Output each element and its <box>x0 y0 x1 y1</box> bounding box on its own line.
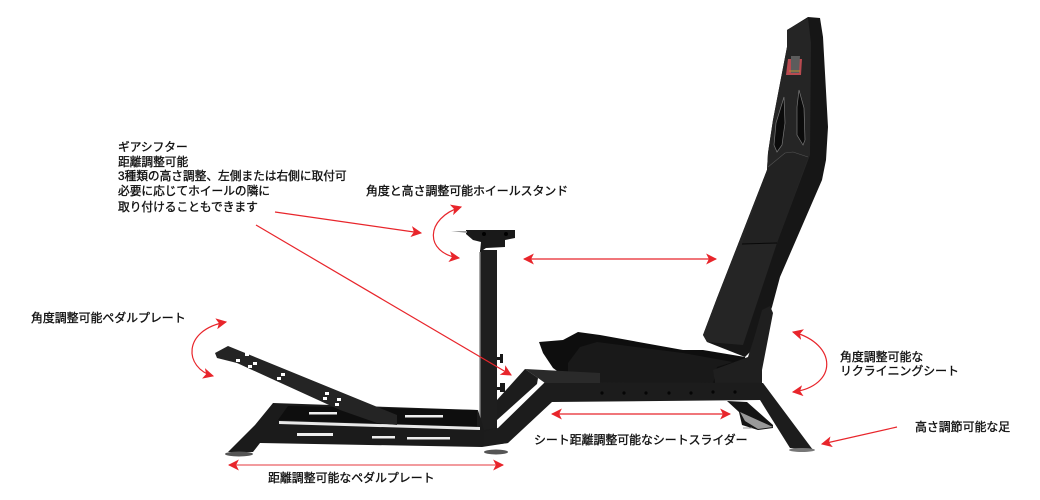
label: feet: 高さ調節可能な足 <box>915 420 1010 434</box>
label: gear shifter: 必要に応じてホイールの隣に <box>118 184 270 198</box>
arrow: wheel stand to seat distance <box>524 258 716 260</box>
seat bracket <box>713 306 773 383</box>
pedal base frame <box>225 403 508 456</box>
label: pedal plate angle: 角度調整可能ペダルプレート <box>31 311 186 325</box>
lower diagonal beam and rail <box>484 382 813 450</box>
slider carriage <box>525 369 600 383</box>
arrow: shifter to wheel stand <box>275 212 421 233</box>
label: gear shifter: 距離調整可能 <box>118 155 188 169</box>
arrow: recline curve <box>793 332 827 392</box>
label: gear shifter: 取り付けることもできます <box>118 201 258 214</box>
label: gear shifter: 3種類の高さ調整、左側または右側に取付可 <box>118 169 347 183</box>
arrow: wheel angle curve <box>433 207 461 258</box>
arrow: pedal plate distance <box>229 464 503 466</box>
label: pedal distance: 距離調整可能なペダルプレート <box>268 471 434 485</box>
racing cockpit product image <box>215 17 828 456</box>
arrow: shifter to seat mount <box>256 225 511 375</box>
seat cushion <box>539 332 749 384</box>
label: recline: 角度調整可能な <box>840 350 923 364</box>
red arrows <box>192 207 827 465</box>
seat slider rail, diagonal beams and legs <box>484 369 815 452</box>
label: gear shifter: ギアシフター <box>118 141 188 154</box>
seat back cutouts <box>774 90 805 152</box>
seat logo <box>786 56 802 75</box>
wheel stand <box>451 230 515 436</box>
label: wheel stand: 角度と高さ調整可能ホイールスタンド <box>366 184 568 198</box>
upper diagonal beam <box>497 369 538 420</box>
arrow: adjustable feet <box>822 427 897 444</box>
arrow: pedal plate angle curve <box>192 322 226 376</box>
arrow: seat slider <box>552 413 730 415</box>
pedal plate <box>215 346 397 425</box>
label: seat slider: シート距離調整可能なシートスライダー <box>534 433 748 447</box>
seat back <box>703 17 828 357</box>
label: recline: リクライニングシート <box>840 364 959 378</box>
